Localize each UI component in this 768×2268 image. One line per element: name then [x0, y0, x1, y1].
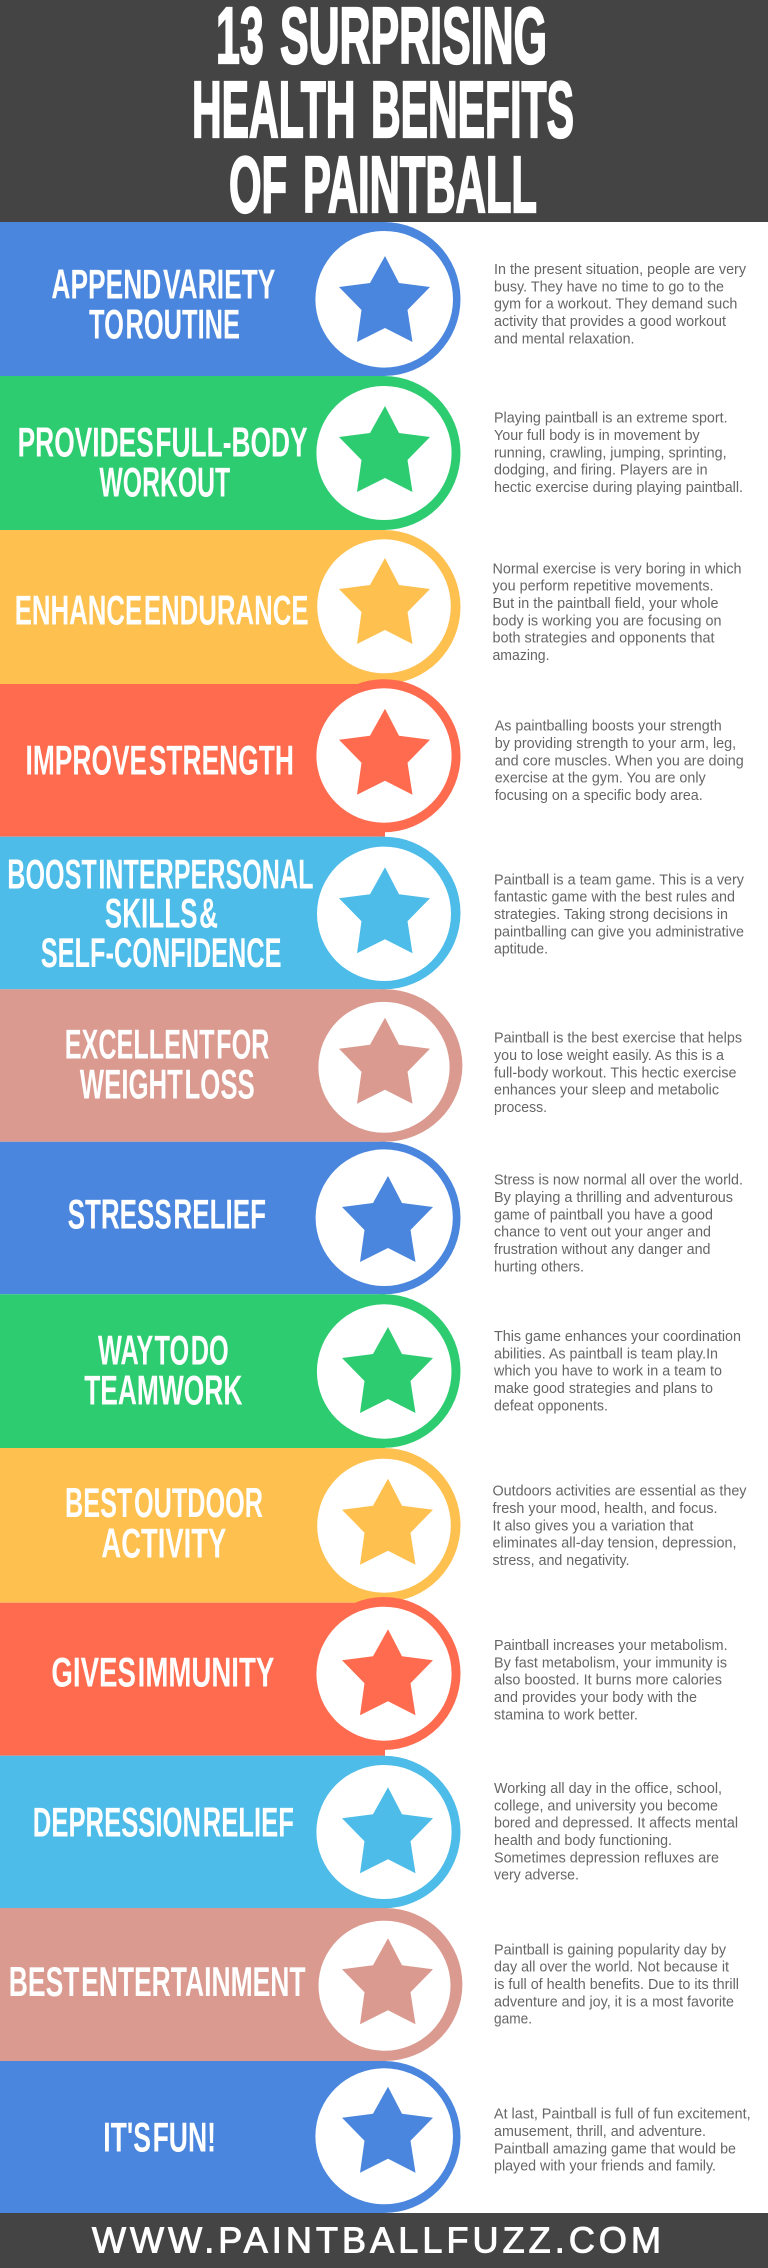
text block: Paintball amazing game that would be: [494, 2140, 736, 2157]
text block: hurting others.: [494, 1258, 584, 1275]
heading: TO ROUTINE: [89, 300, 240, 347]
website url: WWW.PAINTBALLFUZZ.COM: [92, 2219, 661, 2260]
text block: health and body functioning.: [494, 1832, 672, 1849]
text block: Paintball is a team game. This is a very: [494, 871, 744, 888]
text block: This game enhances your coordination: [494, 1328, 741, 1345]
text block: you to lose weight easily. As this is a: [494, 1047, 725, 1064]
panel: best outdoor activity: [0, 1448, 747, 1603]
text block: Paintball is the best exercise that helps: [494, 1030, 742, 1047]
text block: As paintballing boosts your strength: [495, 718, 722, 735]
text block: bored and depressed. It affects mental: [494, 1815, 738, 1832]
text block: [494, 1030, 742, 1116]
text block: At last, Paintball is full of fun excitement,: [494, 2106, 751, 2123]
text block: and mental relaxation.: [494, 330, 634, 347]
text block: college, and university you become: [494, 1797, 718, 1814]
text block: is full of health benefits. Due to its thrill: [494, 1976, 739, 1993]
heading: STRESS RELIEF: [68, 1191, 266, 1238]
text block: stamina to work better.: [494, 1706, 638, 1723]
text block: make good strategies and plans to: [494, 1380, 713, 1397]
icon: star: [316, 386, 452, 520]
heading: EXCELLENT FOR: [65, 1020, 269, 1067]
heading: WORKOUT: [99, 459, 230, 506]
text block: defeat opponents.: [494, 1397, 608, 1414]
text block: focusing on a specific body area.: [495, 787, 703, 804]
heading: WEIGHT LOSS: [80, 1060, 255, 1107]
text block: But in the paintball field, your whole: [492, 595, 718, 612]
text block: Playing paintball is an extreme sport.: [494, 410, 728, 427]
text block: abilities. As paintball is team play.In: [494, 1345, 718, 1362]
text block: and core muscles. When you are doing: [495, 752, 744, 769]
heading: BEST ENTERTAINMENT: [9, 1958, 306, 2005]
icon: star: [316, 1765, 452, 1899]
text block: Your full body is in movement by: [494, 427, 700, 444]
text block: [494, 410, 743, 496]
panel: best entertainment: [0, 1908, 739, 2061]
heading: [65, 1479, 263, 1566]
text block: adventure and joy, it is a most favorite: [494, 1993, 734, 2010]
footer band with website: [0, 2213, 768, 2268]
text block: strategies. Taking strong decisions in: [494, 906, 728, 923]
text block: activity that provides a good workout: [494, 313, 727, 330]
heading: BOOST INTERPERSONAL: [7, 850, 314, 897]
text block: Sometimes depression refluxes are: [494, 1849, 719, 1866]
text block: fantastic game with the best rules and: [494, 889, 735, 906]
panel: provides full-body workout: [0, 376, 743, 530]
text block: In the present situation, people are very: [494, 261, 746, 278]
text block: game of paintball you have a good: [494, 1206, 713, 1223]
text block: paintballing can give you administrative: [494, 923, 744, 940]
icon: star: [315, 231, 453, 368]
text block: full-body workout. This hectic exercise: [494, 1064, 736, 1081]
text block: [493, 1328, 741, 1414]
heading: TEAMWORK: [84, 1367, 242, 1414]
text block: dodging, and firing. Players are in: [494, 462, 708, 479]
text block: both strategies and opponents that: [492, 630, 715, 647]
heading: SELF-CONFIDENCE: [41, 929, 282, 976]
text block: [494, 2106, 751, 2175]
icon: star: [315, 2068, 453, 2204]
heading: IT'S FUN!: [103, 2114, 216, 2161]
heading: PROVIDES FULL-BODY: [18, 419, 308, 466]
text block: amazing.: [492, 647, 550, 664]
text block: which you have to work in a team to: [493, 1363, 722, 1380]
text block: Working all day in the office, school,: [494, 1780, 722, 1797]
heading: BEST OUTDOOR: [65, 1479, 263, 1526]
panel: improve strength: [0, 679, 744, 837]
heading: APPEND VARIETY: [51, 260, 275, 307]
text block: by providing strength to your arm, leg,: [495, 735, 736, 752]
heading: SKILLS &: [105, 889, 218, 936]
text block: [494, 1637, 728, 1723]
text block: Outdoors activities are essential as they: [492, 1483, 747, 1500]
text block: It also gives you a variation that: [492, 1517, 694, 1534]
heading: IMPROVE STRENGTH: [26, 736, 294, 783]
text block: and provides your body with the: [494, 1689, 697, 1706]
text block: gym for a workout. They demand such: [494, 296, 737, 313]
icon: star: [318, 1002, 450, 1133]
text block: Stress is now normal all over the world.: [494, 1172, 743, 1189]
panel: way to do teamwork: [0, 1294, 741, 1448]
text block: process.: [494, 1099, 547, 1116]
text block: [494, 1172, 743, 1275]
heading: [18, 419, 308, 506]
text block: [494, 871, 744, 958]
text block: [494, 261, 746, 347]
text block: played with your friends and family.: [494, 2158, 716, 2175]
text block: aptitude.: [494, 941, 548, 958]
icon: star: [317, 847, 451, 981]
panel: depression relief: [0, 1756, 738, 1908]
text block: chance to vent out your anger and: [494, 1224, 711, 1241]
heading: [84, 1326, 242, 1414]
heading: WAY TO DO: [98, 1326, 229, 1373]
text block: running, crawling, jumping, sprinting,: [494, 444, 727, 461]
icon: star: [316, 688, 452, 823]
text block: [492, 1483, 747, 1569]
header band with title: [0, 0, 768, 229]
text block: [492, 560, 742, 664]
text block: Normal exercise is very boring in which: [492, 560, 742, 577]
text block: busy. They have no time to go to the: [494, 278, 724, 295]
text block: By playing a thrilling and adventurous: [494, 1189, 733, 1206]
icon: star: [316, 1607, 452, 1741]
heading: [51, 260, 275, 347]
icon: star: [317, 1459, 451, 1593]
text block: [494, 1780, 738, 1884]
text block: game.: [494, 2011, 532, 2028]
panel: it's fun: [0, 2061, 751, 2213]
text block: body is working you are focusing on: [492, 612, 722, 629]
title: [192, 0, 574, 229]
panel: gives immunity: [0, 1597, 728, 1756]
text block: exercise at the gym. You are only: [495, 770, 706, 787]
heading: ENHANCE ENDURANCE: [15, 586, 309, 633]
text block: day all over the world. Not because it: [494, 1959, 730, 1976]
heading: [7, 850, 314, 976]
panel: enhance endurance: [0, 530, 742, 684]
text block: eliminates all-day tension, depression,: [492, 1535, 736, 1552]
text block: Paintball increases your metabolism.: [494, 1637, 728, 1654]
text block: also boosted. It burns more calories: [494, 1672, 722, 1689]
text block: [494, 1941, 739, 2028]
text block: enhances your sleep and metabolic: [494, 1082, 719, 1099]
text block: By fast metabolism, your immunity is: [494, 1654, 727, 1671]
icon: star: [317, 539, 451, 673]
text block: amusement, thrill, and adventure.: [494, 2123, 706, 2140]
text block: Paintball is gaining popularity day by: [494, 1941, 726, 1958]
panel: excellent for weight loss: [0, 989, 742, 1142]
panel: stress relief: [0, 1142, 743, 1294]
text block: stress, and negativity.: [492, 1552, 630, 1569]
panel: boost interpersonal skills and self-confidence: [0, 837, 744, 989]
panel: append variety to routine: [0, 222, 746, 376]
text block: very adverse.: [494, 1867, 579, 1884]
text block: you perform repetitive movements.: [492, 578, 714, 595]
text block: frustration without any danger and: [494, 1241, 710, 1258]
heading: GIVES IMMUNITY: [51, 1649, 274, 1696]
heading: [65, 1020, 269, 1107]
icon: star: [317, 1304, 452, 1439]
icon: star: [318, 1921, 450, 2051]
icon: star: [316, 1149, 453, 1286]
heading: DEPRESSION RELIEF: [33, 1799, 294, 1846]
text block: fresh your mood, health, and focus.: [492, 1500, 718, 1517]
text block: hectic exercise during playing paintball.: [494, 479, 743, 496]
heading: ACTIVITY: [101, 1519, 226, 1566]
text block: [495, 718, 744, 804]
